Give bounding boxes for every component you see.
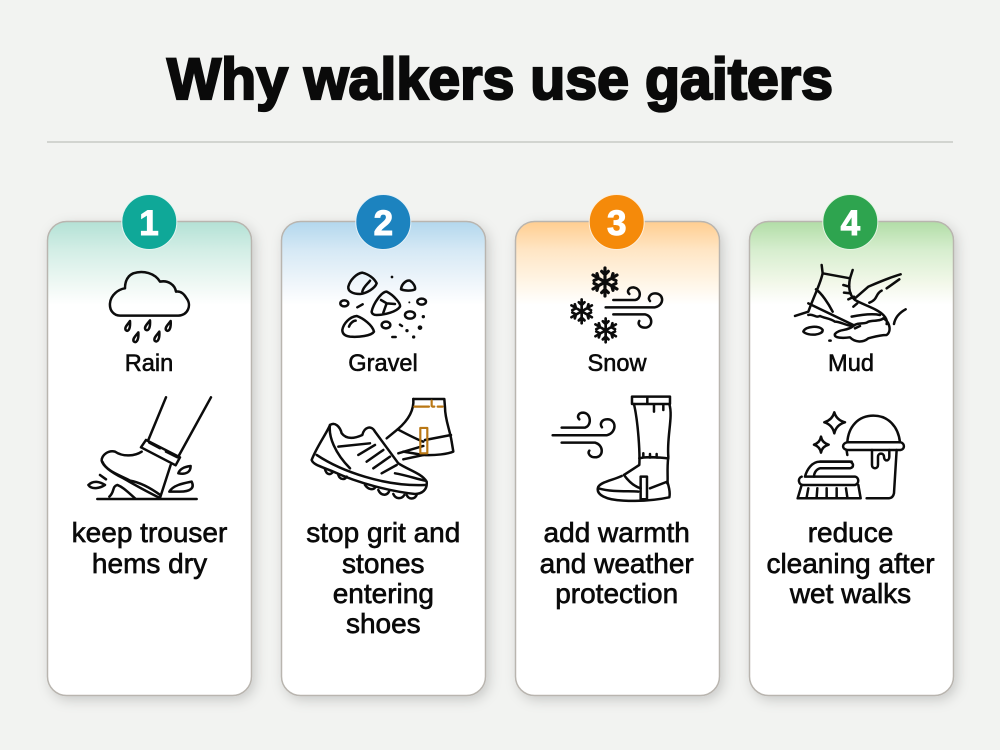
card 2 background	[282, 222, 486, 696]
text: reduce cleaning after wet walks: cleaning after	[766, 548, 935, 579]
badge 1: 1	[139, 204, 159, 243]
label: Mud: Mud	[828, 351, 874, 377]
text: stop grit and stones entering shoes: stones	[342, 548, 425, 579]
icon: brush and bucket	[798, 412, 904, 498]
text: add warmth and weather protection: protection	[555, 578, 678, 609]
text: stop grit and stones entering shoes: entering	[333, 578, 434, 609]
badge 4: 4	[841, 204, 861, 243]
badge 2	[356, 194, 411, 250]
icon: muddy boot	[795, 265, 906, 341]
icon: snowflakes and wind	[571, 268, 662, 342]
label: Snow: Snow	[587, 351, 647, 377]
panel: mud	[750, 194, 954, 696]
icon: wind and gaiter boot	[553, 397, 671, 501]
icon: gravel stones	[340, 273, 426, 339]
text: reduce cleaning after wet walks: reduce	[808, 517, 893, 548]
panel: gravel	[282, 194, 486, 696]
badge 1	[122, 194, 177, 250]
badge 3: 3	[607, 204, 626, 243]
label: Rain: Rain	[125, 351, 173, 377]
text: stop grit and stones entering shoes: stop grit and	[306, 517, 460, 548]
text: stop grit and stones entering shoes: shoes	[346, 608, 421, 639]
icon: trail shoe with gaiter	[312, 399, 453, 498]
panel: snow	[516, 194, 720, 696]
panel: rain	[48, 194, 252, 696]
badge 2: 2	[374, 204, 393, 243]
card 3 background	[516, 222, 720, 696]
text: reduce cleaning after wet walks: wet walks	[789, 578, 911, 609]
card 4 background	[750, 222, 954, 696]
icon: boot splashing	[88, 397, 211, 499]
badge 3	[589, 194, 644, 250]
text: keep trouser hems dry: hems dry	[92, 548, 207, 579]
label: Gravel: Gravel	[348, 351, 418, 377]
card 1 background	[48, 222, 252, 696]
title: Why walkers use gaiters	[167, 47, 833, 112]
text: keep trouser hems dry: keep trouser	[72, 517, 227, 548]
icon: rain cloud	[110, 272, 189, 342]
badge 4	[823, 194, 878, 250]
text: add warmth and weather protection: add warmth	[544, 517, 690, 548]
text: add warmth and weather protection: and weather	[540, 548, 694, 579]
